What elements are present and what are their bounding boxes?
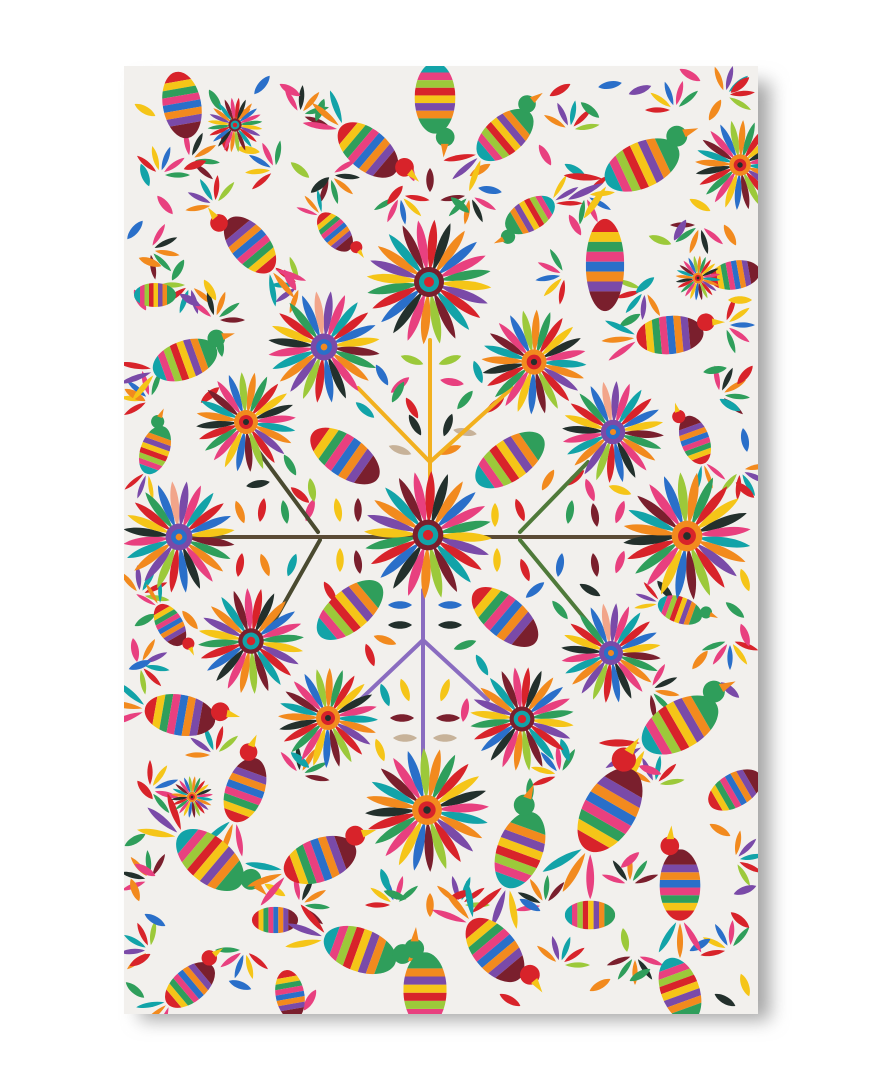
scattered leaves — [123, 66, 758, 1012]
flower: upper left — [268, 292, 380, 402]
flower: right small — [676, 256, 720, 300]
flower: bottom right — [470, 668, 574, 770]
flower: far left — [124, 482, 234, 592]
flower: lower left — [198, 588, 304, 694]
flower: bottom centre — [365, 748, 489, 872]
flower: upper right — [479, 307, 589, 417]
flower: mid right upper — [562, 381, 664, 483]
striped bird bodies around the central flower — [310, 428, 545, 647]
flower: lower left small — [171, 776, 213, 818]
large embroidered birds — [124, 66, 758, 1014]
flower: central — [361, 468, 495, 602]
feather sprays filling the border areas — [108, 53, 780, 988]
flower: bottom left — [276, 666, 380, 770]
flower: lower right — [561, 603, 661, 703]
drop shadow — [140, 82, 770, 1020]
flower: top centre — [366, 220, 492, 344]
woven white background — [124, 66, 758, 1014]
flower: mid left upper — [196, 372, 296, 472]
flower: top right corner — [695, 120, 758, 210]
embroidered stems — [179, 340, 690, 760]
flower: top left small — [208, 98, 262, 152]
flower: far right — [624, 472, 750, 600]
tapestry panel — [124, 66, 758, 1014]
